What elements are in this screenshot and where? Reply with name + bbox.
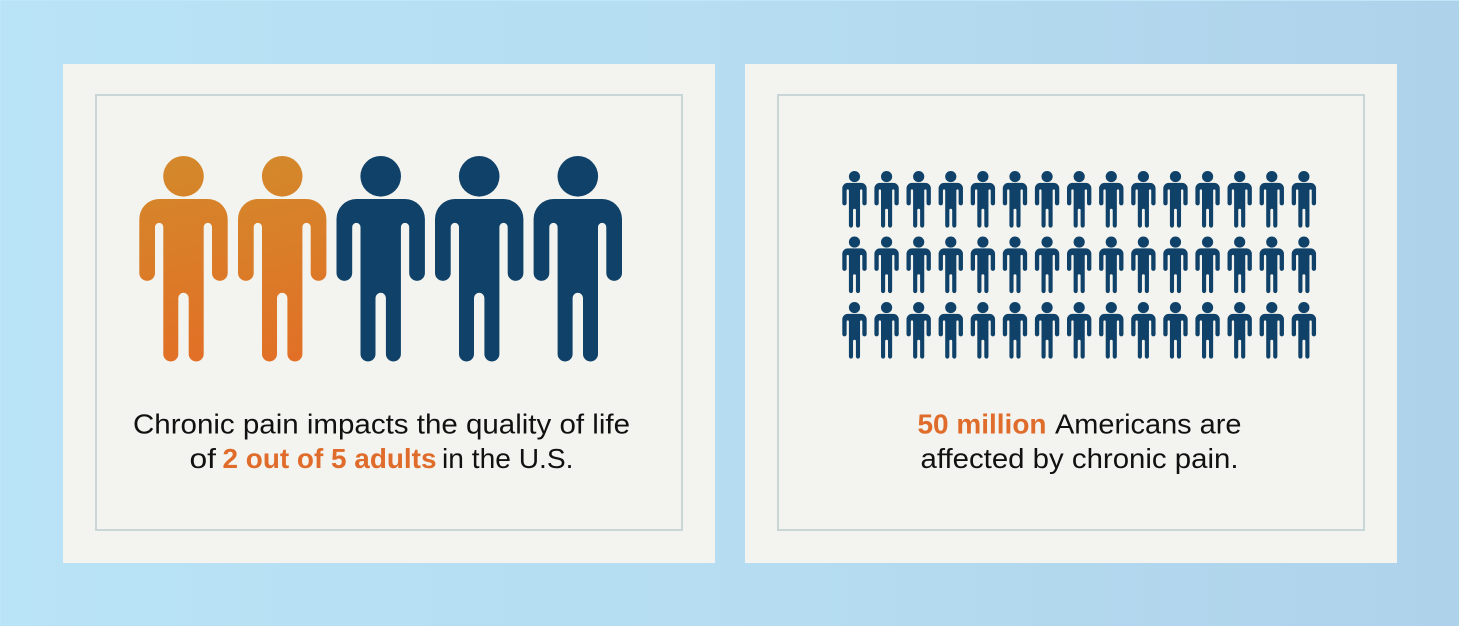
caption: chronic pain impacts: in the U.S. — [442, 443, 574, 474]
caption: chronic pain impacts: 2 out of 5 adults — [222, 443, 436, 474]
caption: chronic pain impacts: Chronic pain impacts the quality of life — [133, 408, 630, 440]
caption: 50 million Americans: affected by chronic pain. — [920, 443, 1238, 474]
caption: chronic pain impacts: of — [190, 443, 216, 474]
caption: 50 million Americans — [918, 408, 1242, 474]
pictogram: three rows of fifteen people — [842, 171, 1316, 359]
caption: chronic pain impacts — [133, 408, 630, 474]
caption: 50 million Americans: 50 million — [918, 408, 1046, 440]
panel: 50 million Americans — [745, 64, 1397, 563]
caption: 50 million Americans: Americans are — [1055, 408, 1242, 440]
pictogram: five people, two highlighted — [139, 156, 622, 362]
panel: 2 out of 5 adults — [63, 64, 715, 563]
